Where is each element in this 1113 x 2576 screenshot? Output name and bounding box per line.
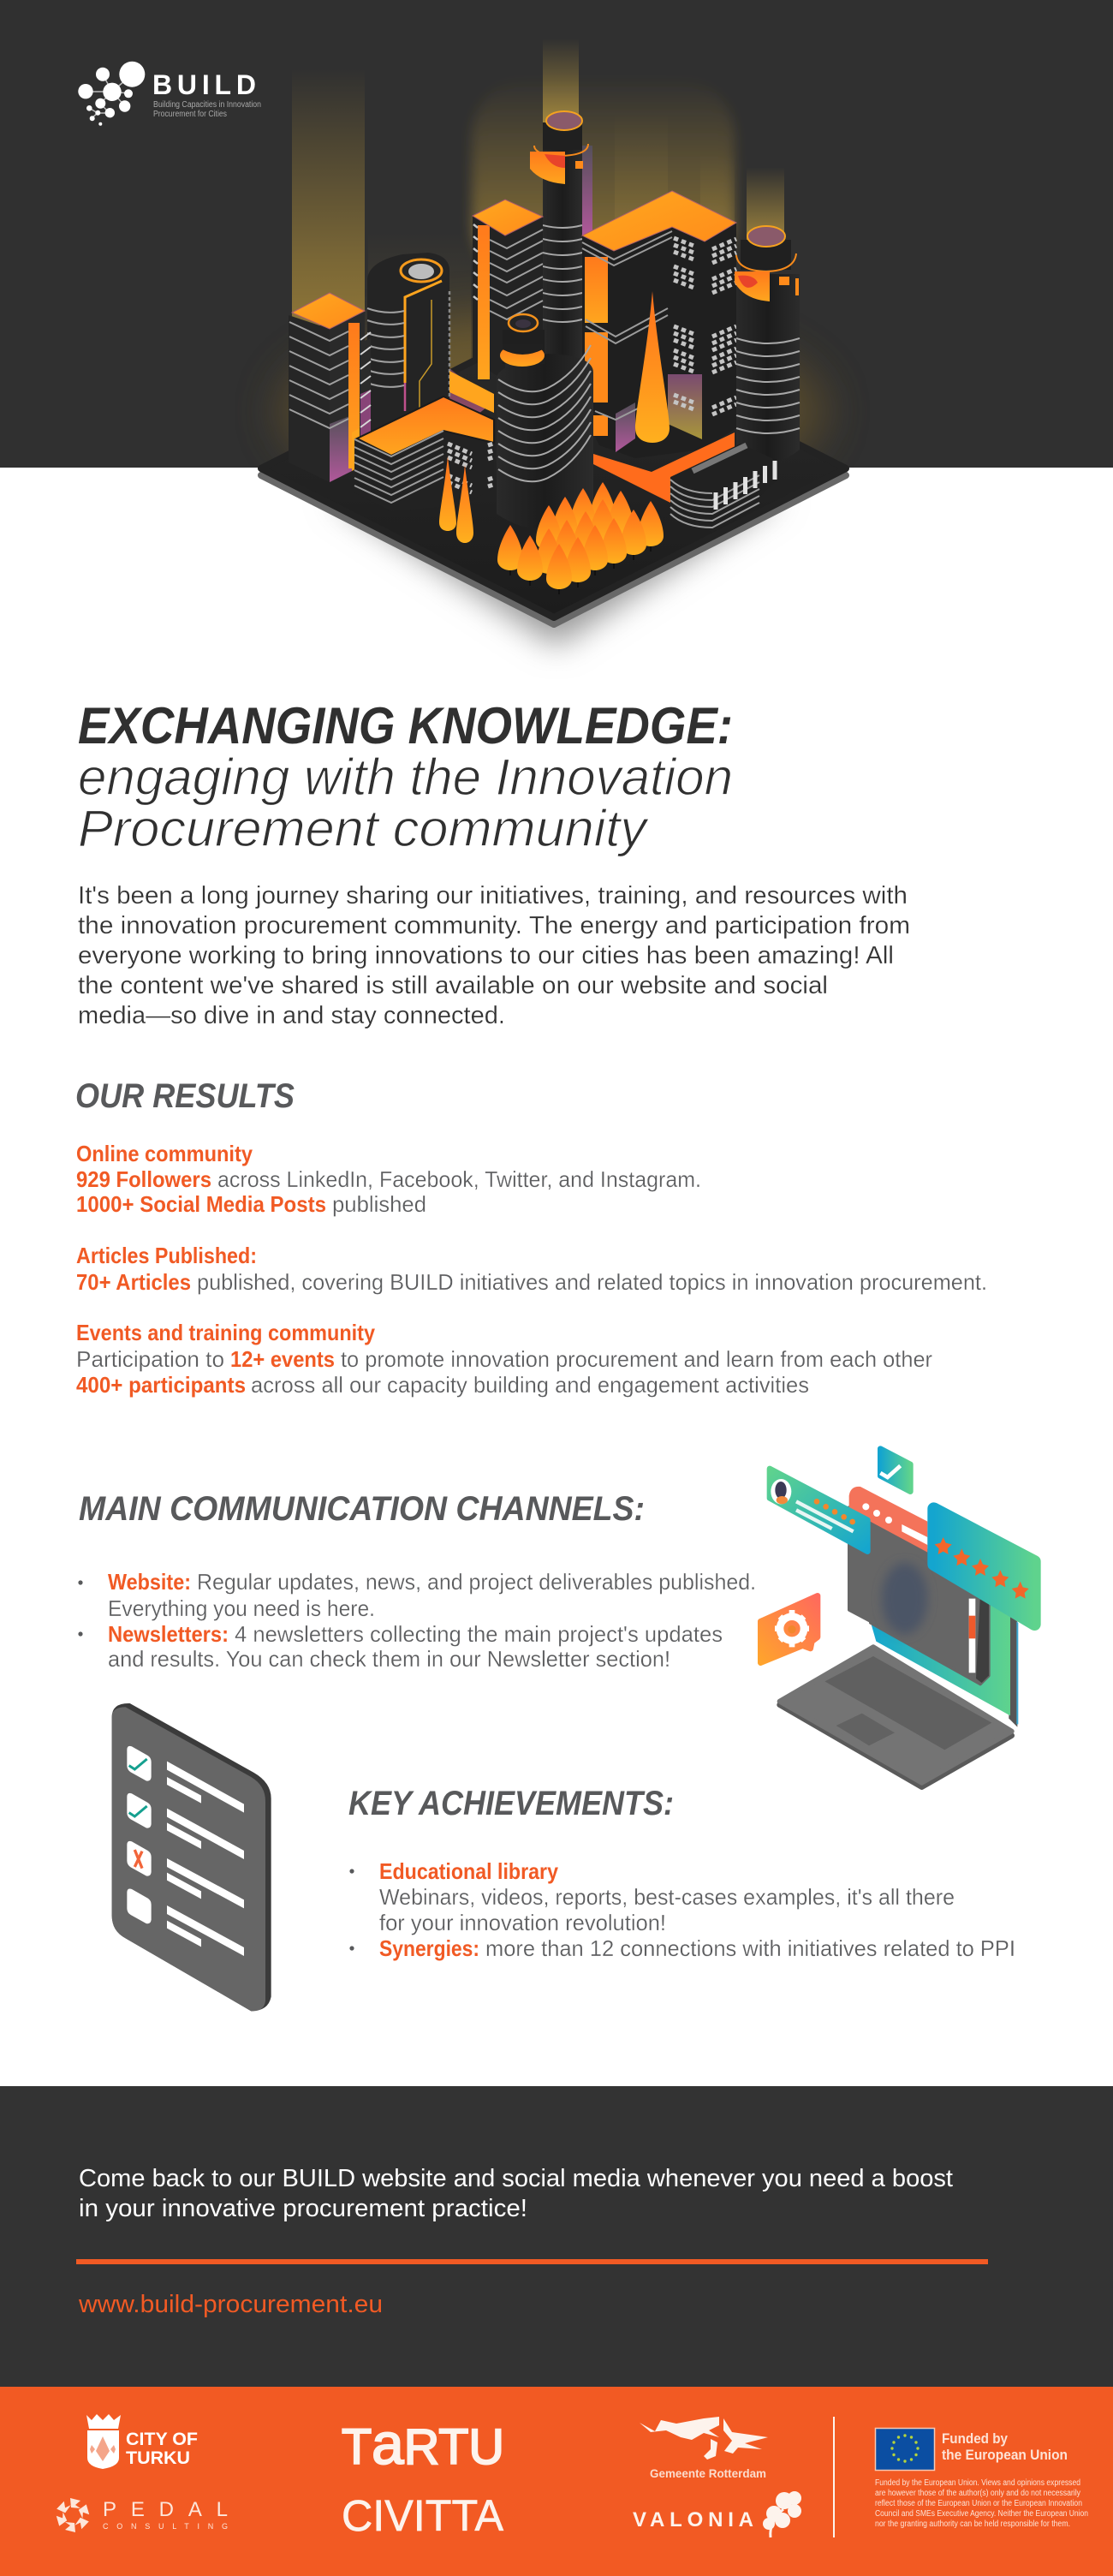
EU funding block	[875, 2429, 1088, 2529]
funded by label	[942, 2431, 1068, 2463]
achievements bullet list: more than 12 connections with initiatives related to PPI	[485, 1935, 1015, 1961]
profile review card	[770, 1469, 867, 1552]
tall orange cone	[635, 291, 670, 443]
checklist lines	[167, 1762, 244, 1956]
tablet face	[112, 1707, 265, 2011]
flame tree cluster	[497, 482, 664, 594]
achievements bullet list	[349, 1858, 1015, 1961]
intro paragraph	[78, 882, 910, 1029]
funding disclaimer: are however those of the author(s) only and do not necessarily	[875, 2489, 1080, 2498]
logo: Pedal Consulting	[54, 2498, 228, 2532]
logo: Gemeente Rotterdam: Gemeente Rotterdam	[650, 2466, 766, 2480]
logo tagline: Procurement for Cities	[153, 110, 227, 119]
channels bullet list: 4 newsletters collecting the main project's updates	[235, 1621, 723, 1647]
middle orange block	[449, 371, 494, 413]
funding disclaimer	[875, 2478, 1088, 2529]
results: articles published: 70+ Articles	[76, 1269, 191, 1295]
closing dark panel	[0, 2086, 1113, 2387]
results: events and training: Participation to	[76, 1346, 224, 1372]
results: events and training: across all our capacity building and engagement activities	[251, 1372, 809, 1398]
check badge	[880, 1449, 910, 1492]
channels bullet list: and results. You can check them in our Newsletter section!	[108, 1646, 670, 1672]
main title	[78, 697, 733, 857]
EU flag	[875, 2429, 935, 2470]
ring-top tower	[367, 253, 449, 454]
intro paragraph: It's been a long journey sharing our initiatives, training, and resources with	[78, 882, 908, 909]
logo: Valonia	[633, 2491, 801, 2537]
results: events and training: 400+ participants	[76, 1372, 246, 1398]
browser title bar	[849, 1487, 927, 1553]
settings gear card	[760, 1595, 818, 1663]
results: events and training: Events and training community	[76, 1320, 375, 1345]
results: events and training: 12+ events	[230, 1346, 335, 1372]
main title: EXCHANGING KNOWLEDGE:	[78, 697, 733, 754]
logo tagline: Building Capacities in Innovation	[153, 100, 261, 110]
tablet body	[112, 1703, 271, 2011]
icon: checklist tablet	[112, 1703, 271, 2011]
achievements bullet list: Webinars, videos, reports, best-cases examples, it's all there	[379, 1884, 955, 1910]
intro paragraph: the innovation procurement community. The energy and participation from	[78, 912, 910, 939]
results: online community: Online community	[76, 1141, 253, 1166]
funding disclaimer: Funded by the European Union. Views and opinions expressed	[875, 2478, 1080, 2488]
left chevron tower	[289, 293, 371, 482]
orange divider	[76, 2259, 988, 2264]
platform shadow	[330, 497, 783, 647]
results: articles published	[76, 1243, 987, 1295]
achievements bullet list: Educational library	[379, 1858, 558, 1884]
results: events and training	[76, 1320, 932, 1398]
channels bullet list	[78, 1569, 756, 1672]
heading: our results: OUR RESULTS	[75, 1077, 295, 1115]
results: online community: 1000+ Social Media Posts	[76, 1191, 326, 1217]
logo: Gemeente Rotterdam	[640, 2417, 768, 2480]
intro paragraph: the content we've shared is still available on our website and social	[78, 972, 828, 999]
low striped building	[670, 444, 777, 533]
main title: engaging with the Innovation	[78, 748, 733, 806]
results: articles published: published, covering BUILD initiatives and related topics in innovation procurement.	[197, 1269, 987, 1295]
results: online community: across LinkedIn, Facebook, Twitter, and Instagram.	[217, 1166, 701, 1192]
laptop screen back	[849, 1507, 1018, 1727]
laptop base and keyboard	[780, 1647, 1012, 1787]
logo: City of Turku: TURKU	[126, 2448, 190, 2468]
checkboxes	[127, 1746, 152, 1923]
central tallest tower	[530, 111, 592, 368]
results: online community	[76, 1141, 701, 1217]
partner footer	[0, 2387, 1113, 2576]
channels bullet list: Regular updates, news, and project deliverables published.	[197, 1569, 756, 1595]
funding disclaimer: nor the granting authority can be held responsible for them.	[875, 2519, 1070, 2529]
heading: key achievements: KEY ACHIEVEMENTS:	[348, 1785, 674, 1822]
hero illustration: isometric glowing city	[261, 39, 846, 647]
website link: www.build-procurement.eu	[78, 2291, 383, 2318]
closing message: in your innovative procurement practice!	[79, 2195, 527, 2222]
channels bullet list: Website:	[108, 1569, 191, 1595]
main title: Procurement community	[78, 800, 650, 857]
achievements bullet list: for your innovation revolution!	[379, 1910, 666, 1935]
logo wordmark: BUILD	[152, 69, 256, 100]
inner magenta courtyard	[367, 368, 492, 462]
large chevron-roof building	[582, 191, 736, 458]
logo mark: connected circles	[78, 62, 145, 126]
channels bullet list: Everything you need is here.	[108, 1595, 375, 1621]
header dark band	[0, 0, 1113, 468]
logo: Pedal Consulting: CONSULTING	[103, 2522, 228, 2531]
star rating card	[934, 1509, 1034, 1625]
icon: laptop with review cards	[760, 1449, 1034, 1787]
results: articles published: Articles Published:	[76, 1243, 257, 1268]
funded by label: Funded by	[942, 2431, 1009, 2447]
logo: Civitta: CIVITTA	[342, 2491, 503, 2540]
intro paragraph: media—so dive in and stay connected.	[78, 1002, 505, 1029]
logo: City of Turku	[86, 2414, 198, 2469]
heading: main communication channels: MAIN COMMUNICATION CHANNELS:	[79, 1490, 645, 1528]
orange plaza	[593, 432, 735, 503]
funded by label: the European Union	[942, 2448, 1068, 2463]
achievements bullet list: Synergies:	[379, 1935, 479, 1961]
logo tagline	[153, 100, 261, 119]
right tower	[735, 226, 800, 462]
funding disclaimer: reflect those of the European Union or the European Innovation	[875, 2499, 1082, 2508]
platform base	[261, 320, 846, 624]
front left chevron block	[354, 397, 494, 511]
results: online community: 929 Followers	[76, 1166, 211, 1192]
city glow	[278, 39, 826, 510]
intro paragraph: everyone working to bring innovations to our cities has been amazing! All	[78, 942, 894, 969]
twin small cones	[439, 456, 473, 543]
closing message: Come back to our BUILD website and social media whenever you need a boost	[79, 2165, 953, 2192]
logo: BUILD	[78, 62, 261, 126]
channels bullet list: Newsletters:	[108, 1621, 229, 1647]
back chevron tower	[473, 200, 543, 381]
results: online community: published	[332, 1191, 426, 1217]
vertical divider	[833, 2417, 835, 2537]
logo: Pedal Consulting: PEDAL	[103, 2498, 228, 2521]
logo: Valonia: VALONIA	[633, 2508, 753, 2531]
front central cylinder tower	[497, 314, 593, 529]
closing message	[79, 2165, 953, 2222]
results: events and training: to promote innovation procurement and learn from each other	[341, 1346, 932, 1372]
logo: City of Turku: CITY OF	[126, 2430, 198, 2449]
logo: Tartu: TaRTU	[342, 2412, 504, 2477]
